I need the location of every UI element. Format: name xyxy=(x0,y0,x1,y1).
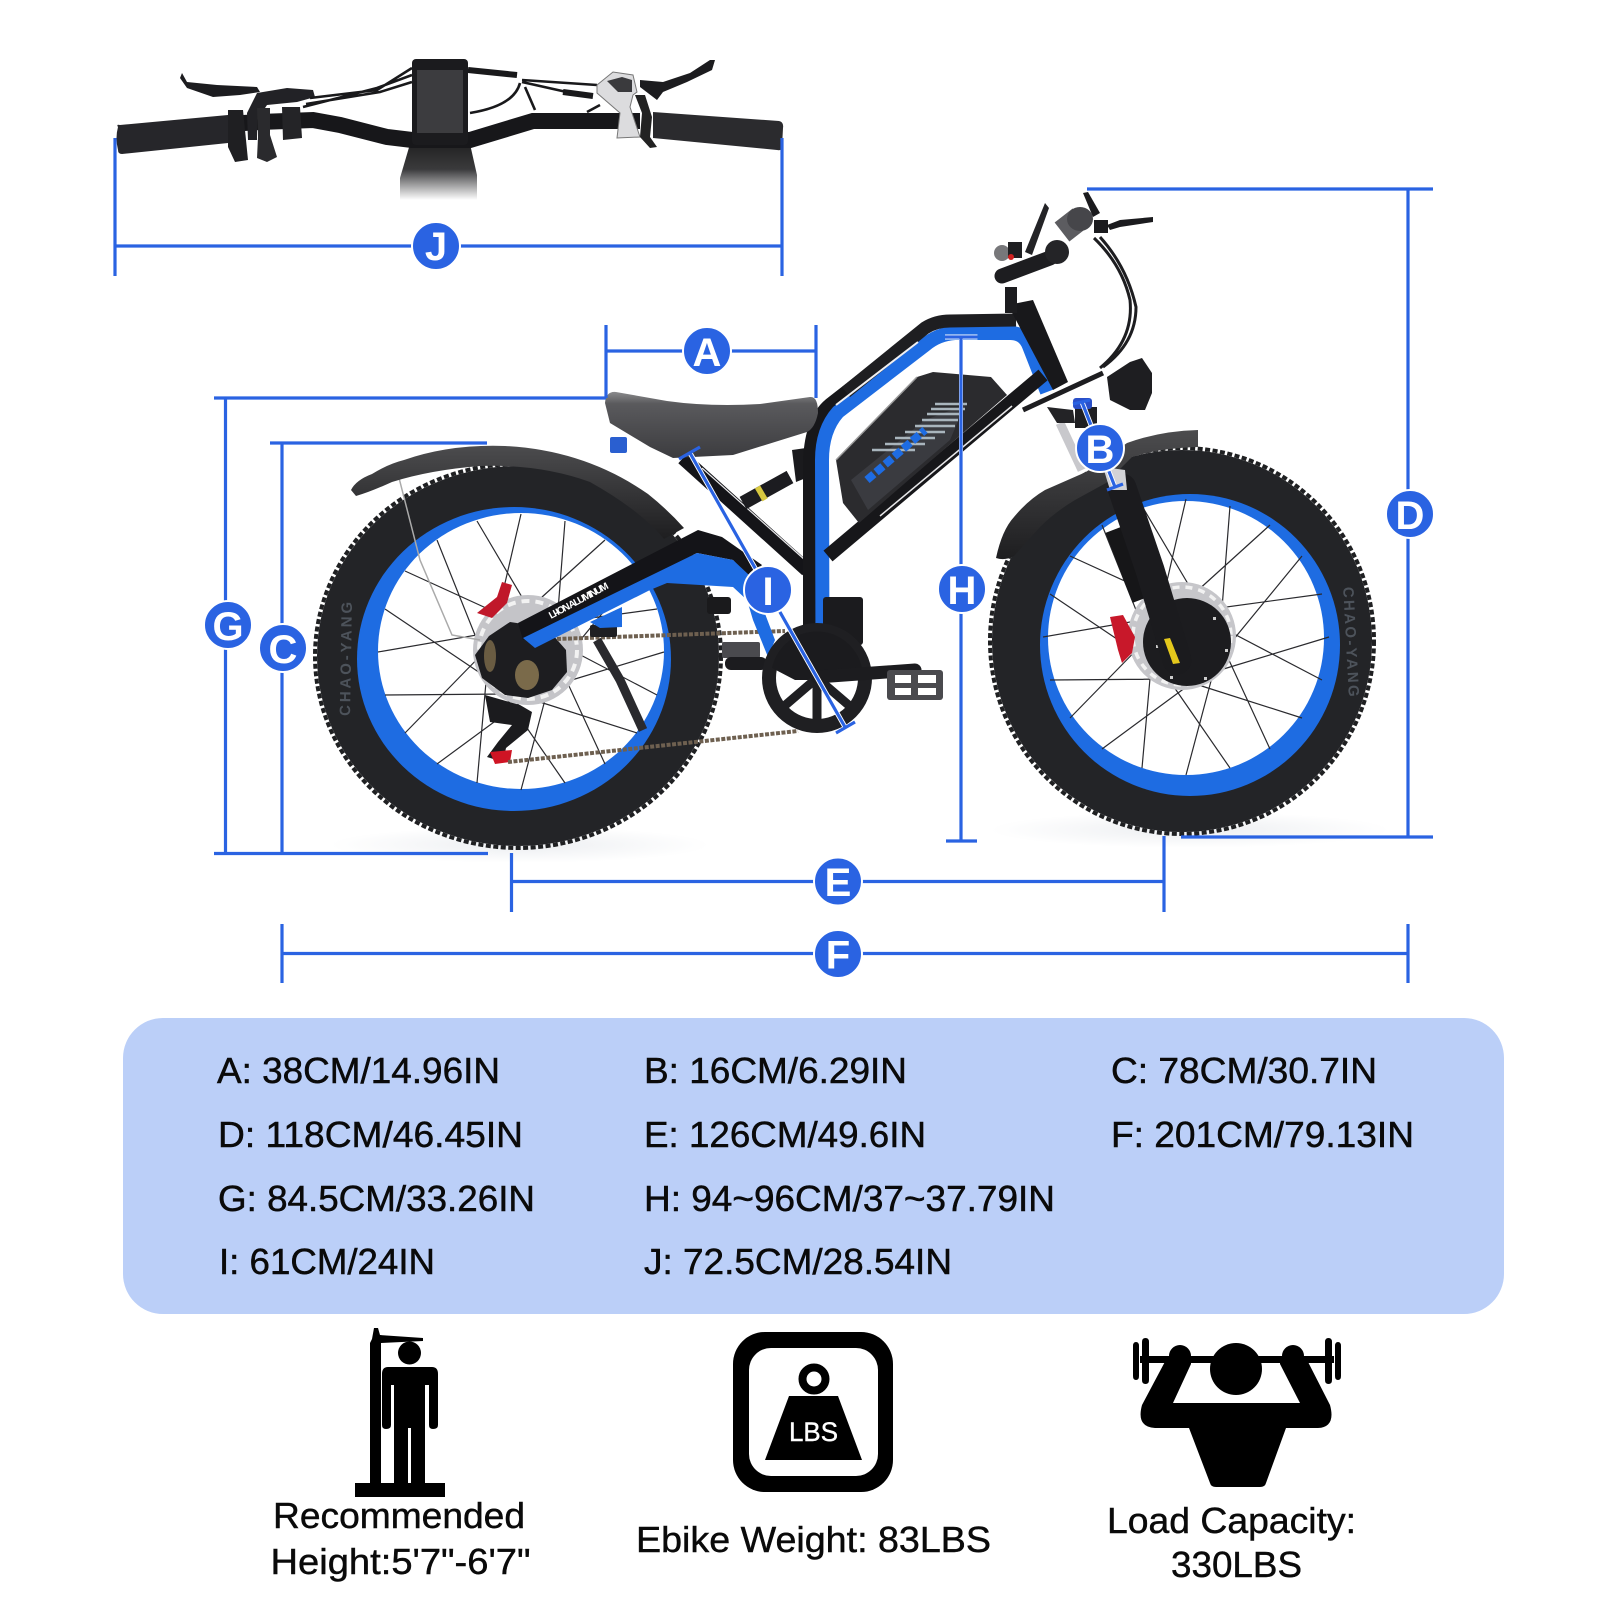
battery logo xyxy=(867,430,925,480)
dimension A: A xyxy=(693,331,721,375)
cable bundle xyxy=(1094,237,1136,368)
lower cable xyxy=(1023,373,1103,410)
icon: person height xyxy=(355,1328,445,1497)
rear fork leg xyxy=(1113,530,1140,600)
front pedal xyxy=(887,670,943,700)
front disc vents xyxy=(1133,587,1231,685)
dimension B xyxy=(1073,400,1124,490)
rear pedal xyxy=(722,642,760,658)
dimension F xyxy=(282,924,1408,983)
dimension E xyxy=(512,836,1164,912)
LBS label: LBS xyxy=(789,1417,838,1447)
spec I: I: 61CM/24IN xyxy=(219,1241,435,1282)
front tire brand: CHAO-YANG xyxy=(1339,586,1362,697)
blue frame tube xyxy=(822,333,1047,652)
left grip end xyxy=(994,245,1010,261)
down tube xyxy=(828,375,1043,556)
headlight xyxy=(1107,358,1152,410)
rear wheel xyxy=(315,464,721,848)
lower fork leg xyxy=(1122,488,1177,660)
kickstand xyxy=(597,640,643,730)
rear rim opening xyxy=(378,513,664,789)
caption: load capacity: Load Capacity: xyxy=(1107,1500,1356,1541)
dimension G xyxy=(204,398,606,854)
caption: height value: Height:5'7"-6'7" xyxy=(270,1541,530,1582)
bike frame and drivetrain xyxy=(508,287,1068,762)
left grip clamp xyxy=(1008,242,1022,258)
down tube highlight xyxy=(880,406,1012,516)
fork seal silver xyxy=(1103,467,1127,490)
left brake lever xyxy=(180,73,260,97)
spec J: J: 72.5CM/28.54IN xyxy=(644,1241,952,1282)
caption: recommended height: Recommended xyxy=(273,1495,525,1536)
grip cylinder xyxy=(1062,218,1080,232)
shock label xyxy=(755,485,768,501)
saddle xyxy=(605,392,818,458)
left grip xyxy=(116,115,228,154)
rear tire brand: CHAO-YANG xyxy=(337,602,356,716)
left thumb shifter xyxy=(257,108,277,162)
swingarm label: LI-ION ALUMINUM xyxy=(547,581,611,622)
dimension I xyxy=(679,447,855,733)
dimension H xyxy=(938,337,986,841)
lever body xyxy=(1094,220,1108,233)
yellow sticker xyxy=(1164,638,1180,664)
dimension J xyxy=(115,138,782,276)
base xyxy=(355,1483,445,1497)
top view handlebar photo xyxy=(116,59,783,200)
front tire tread xyxy=(990,448,1374,834)
front rim xyxy=(1040,494,1340,796)
bar clamp xyxy=(1045,240,1069,264)
top tube highlight xyxy=(836,342,918,405)
display body xyxy=(412,59,468,145)
spec E: E: 126CM/49.6IN xyxy=(644,1114,926,1155)
kickstand clamp xyxy=(590,625,617,637)
disc vents xyxy=(479,601,577,699)
steering block xyxy=(1075,407,1097,428)
shock xyxy=(743,477,790,503)
spec C: C: 78CM/30.7IN xyxy=(1111,1050,1377,1091)
rear spokes xyxy=(378,514,664,790)
dimension D: D xyxy=(1396,494,1424,538)
head xyxy=(398,1342,421,1364)
steerer xyxy=(1005,287,1017,313)
red switch xyxy=(1008,254,1014,260)
dimension I: I xyxy=(762,570,774,614)
top lever tip xyxy=(1083,192,1100,217)
front rim opening xyxy=(1048,501,1324,775)
display xyxy=(1025,203,1049,255)
dimension C: C xyxy=(269,628,297,672)
barbell xyxy=(1140,1356,1334,1363)
blue cap xyxy=(1073,398,1092,409)
rear disc xyxy=(473,595,583,705)
derailleur red pulley xyxy=(490,750,512,764)
dimension C xyxy=(259,443,487,853)
fender stay wire xyxy=(397,470,480,640)
icon: weight xyxy=(733,1332,893,1492)
inner rounded square xyxy=(749,1348,878,1476)
rear rim xyxy=(357,507,671,811)
left lever bracket xyxy=(247,88,315,140)
fork crown xyxy=(1047,407,1075,423)
spec D: D: 118CM/46.45IN xyxy=(218,1114,523,1155)
rear shock dark block xyxy=(707,597,731,614)
battery stripes xyxy=(872,404,967,450)
rear light xyxy=(610,437,627,453)
caption: ebike weight: Ebike Weight: 83LBS xyxy=(636,1519,991,1560)
front fork xyxy=(1047,398,1180,664)
weight body xyxy=(765,1396,862,1460)
derailleur cage xyxy=(485,695,532,762)
rear caliper xyxy=(477,582,512,618)
black top tube xyxy=(846,320,1016,392)
cables xyxy=(303,68,600,113)
handlebar stem xyxy=(1002,258,1050,276)
front tire xyxy=(992,450,1372,832)
display screen xyxy=(417,70,463,133)
handlebar tube xyxy=(228,120,640,140)
spec F: F: 201CM/79.13IN xyxy=(1111,1114,1414,1155)
battery edge highlight xyxy=(836,377,917,460)
cable wrap right xyxy=(468,70,593,96)
icon: load capacity xyxy=(1133,1338,1341,1487)
left button pod xyxy=(228,110,248,162)
rear tire xyxy=(317,466,719,846)
cassette cogs xyxy=(515,660,539,690)
spec B: B: 16CM/6.29IN xyxy=(644,1050,907,1091)
measuring pole xyxy=(370,1328,423,1484)
battery panel xyxy=(851,405,965,510)
head xyxy=(1210,1343,1262,1395)
right grip xyxy=(653,112,783,150)
front disc xyxy=(1128,582,1236,690)
floor shadows xyxy=(330,812,1390,863)
spec G: G: 84.5CM/33.26IN xyxy=(218,1178,535,1219)
battery xyxy=(836,372,1007,523)
spec H: H: 94~96CM/37~37.79IN xyxy=(644,1178,1055,1219)
front fender xyxy=(996,430,1198,559)
arms and torso xyxy=(1141,1356,1332,1487)
pedal cutouts xyxy=(895,675,936,695)
dimension D xyxy=(1087,189,1434,837)
rear crank xyxy=(725,657,767,670)
dimension E: E xyxy=(825,861,851,905)
front caliper xyxy=(1110,615,1135,663)
outer rounded square xyxy=(733,1332,893,1492)
right clamp xyxy=(635,95,657,148)
hands xyxy=(1169,1345,1304,1356)
rear fender xyxy=(351,446,684,539)
cassette cogs left xyxy=(484,640,496,672)
head tube xyxy=(1008,300,1068,390)
shock mount xyxy=(792,448,806,482)
front spokes xyxy=(1043,499,1329,775)
chain xyxy=(508,631,798,762)
front hub motor xyxy=(1143,598,1231,686)
dimension H: H xyxy=(948,569,976,613)
dimension G: G xyxy=(212,605,244,649)
dimension F: F xyxy=(826,934,850,978)
rear cassette spider xyxy=(475,622,567,698)
hub bolts xyxy=(1156,617,1228,680)
cockpit side view xyxy=(994,192,1153,410)
shifter dial xyxy=(607,77,632,92)
strut highlight xyxy=(702,468,805,560)
seat tube black xyxy=(810,380,862,660)
panel: dimensions table xyxy=(123,1018,1504,1314)
chainring spokes xyxy=(782,678,852,726)
swingarm blue xyxy=(523,553,775,657)
controller box xyxy=(823,597,863,645)
rear strut xyxy=(683,458,807,570)
dimension J: J xyxy=(425,225,447,269)
small blue gusset xyxy=(590,607,622,628)
caption: load value: 330LBS xyxy=(1171,1544,1302,1585)
grip end xyxy=(1067,207,1093,231)
spec A: A: 38CM/14.96IN xyxy=(217,1050,500,1091)
dimension A xyxy=(606,325,816,398)
swingarm black band xyxy=(518,530,762,640)
brake lever xyxy=(1107,217,1153,230)
body xyxy=(382,1367,438,1483)
rear tire tread xyxy=(315,464,721,848)
dimension B: B xyxy=(1086,428,1114,472)
upper fork stanchion xyxy=(1060,423,1082,470)
chainring ring xyxy=(769,630,865,726)
right brake lever xyxy=(640,60,715,100)
crank arm xyxy=(817,670,915,677)
left throttle clamp xyxy=(282,107,302,140)
ring xyxy=(802,1368,826,1390)
plates xyxy=(1133,1338,1341,1384)
white shifter xyxy=(597,72,640,138)
front wheel xyxy=(990,448,1374,834)
stem fading out xyxy=(400,144,477,200)
chainring upper cover xyxy=(772,632,862,680)
